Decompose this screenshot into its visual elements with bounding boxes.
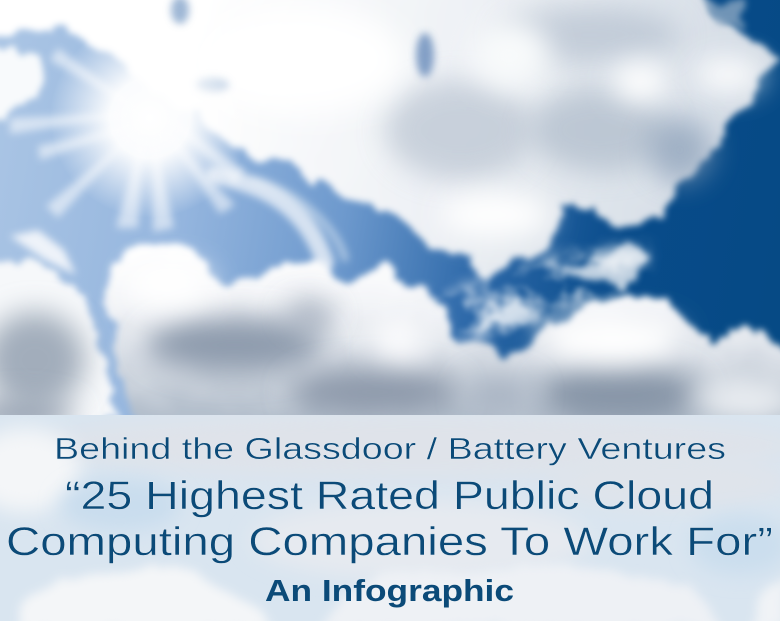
cloud: upper mass bbox=[0, 0, 780, 276]
headline line 2: Computing Companies To Work For” bbox=[6, 520, 773, 564]
cloud: top-right wisp bbox=[700, 0, 750, 25]
cloud: lower left bbox=[0, 258, 122, 429]
cloud: left wisp bbox=[0, 48, 42, 125]
tagline: An Infographic bbox=[265, 573, 514, 608]
sun with rays bbox=[6, 47, 246, 234]
headline line 1: “25 Highest Rated Public Cloud bbox=[65, 474, 714, 518]
cloud: small left bbox=[10, 230, 76, 275]
cloud: lower main bbox=[104, 245, 780, 440]
text band background with faded clouds bbox=[0, 413, 780, 621]
cloud: right puff bbox=[555, 245, 648, 288]
subtitle: Behind the Glassdoor / Battery Ventures bbox=[54, 431, 726, 466]
text block: title bbox=[6, 431, 773, 608]
sky photograph bbox=[0, 0, 780, 440]
cloud: gap wisps bbox=[430, 245, 650, 340]
cloud: swirl wisps bbox=[215, 175, 345, 262]
